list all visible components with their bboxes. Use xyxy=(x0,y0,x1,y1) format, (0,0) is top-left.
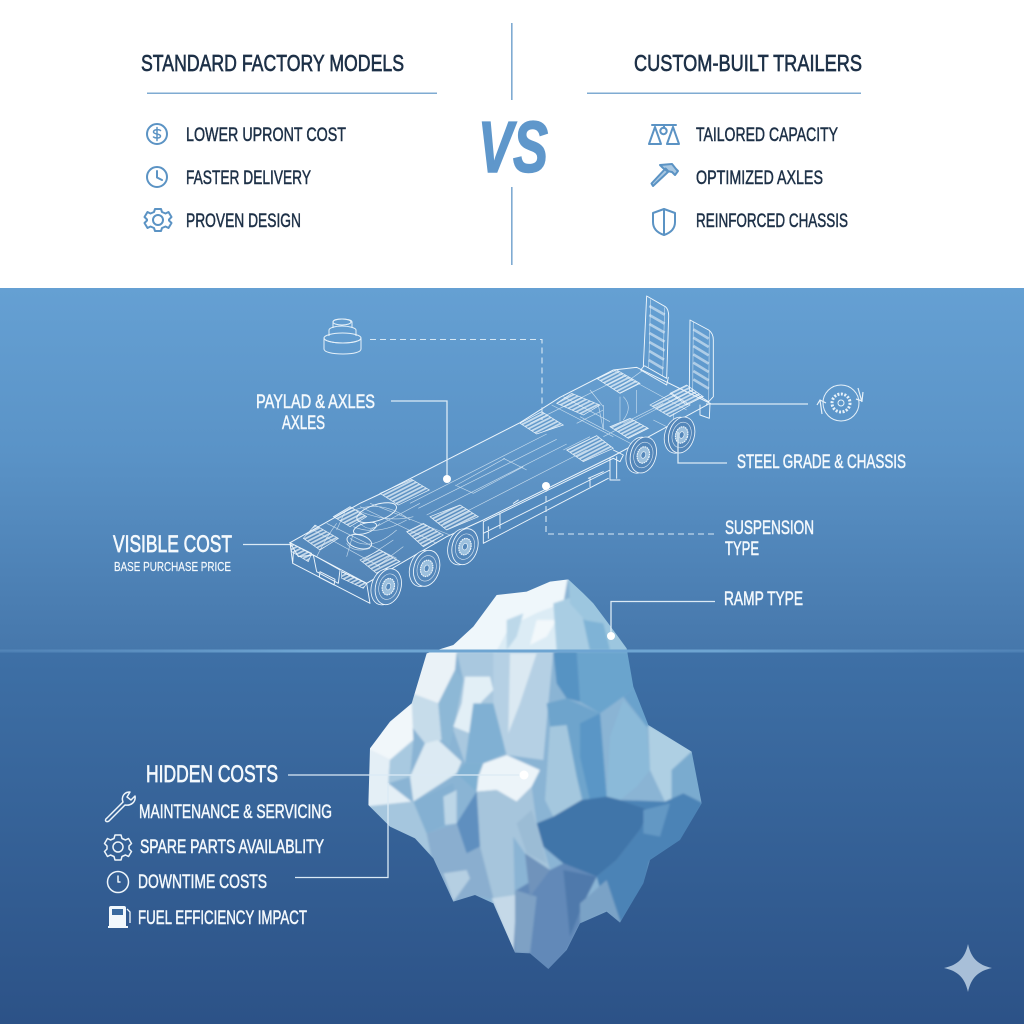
callout: visible cost xyxy=(113,531,290,574)
below-water background xyxy=(0,651,1024,1024)
label: visible cost: VISIBLE COST xyxy=(113,531,232,558)
connector: downtime costs xyxy=(295,783,388,878)
icon: clock xyxy=(108,872,128,892)
label: base purchase price: BASE PURCHASE PRICE xyxy=(114,559,231,574)
ramp: right xyxy=(689,320,713,402)
item: fuel efficiency impact: FUEL EFFICIENCY IMPACT xyxy=(138,908,307,929)
icon: wrench xyxy=(106,792,135,822)
icon: gear xyxy=(144,209,172,231)
icon: hammer xyxy=(652,164,678,186)
label: payload and axles: PAYLAD & AXLES xyxy=(256,392,375,413)
dashed connector: cylinders xyxy=(370,340,542,420)
heading: standard factory models: STANDARD FACTORY MODELS xyxy=(141,50,404,76)
item: spare parts availability: SPARE PARTS AVAILABLITY xyxy=(140,837,324,858)
trailer blueprint xyxy=(290,296,713,608)
callout: wheel and rotation xyxy=(706,385,863,421)
above-water background xyxy=(0,288,1024,651)
item: reinforced chassis: REINFORCED CHASSIS xyxy=(696,210,848,232)
item: lower upfront cost: LOWER UPRONT COST xyxy=(186,124,346,146)
callout: suspension type xyxy=(542,482,814,560)
vs label: VS xyxy=(478,108,548,188)
item: optimized axles: OPTIMIZED AXLES xyxy=(696,167,823,189)
item: proven design: PROVEN DESIGN xyxy=(186,210,301,232)
icon: wheel with arrows xyxy=(817,385,863,421)
hatched panels xyxy=(290,370,703,588)
icon: sparkle xyxy=(944,944,992,992)
white comparison background xyxy=(0,0,1024,288)
wheels xyxy=(367,414,699,608)
label: axles second line: AXLES xyxy=(282,413,325,434)
deck xyxy=(290,367,710,603)
heading: custom-built trailers: CUSTOM-BUILT TRAILERS xyxy=(634,50,862,76)
panel: hidden costs xyxy=(104,761,528,929)
panel: standard factory models xyxy=(141,50,437,232)
connector: hidden costs xyxy=(288,774,524,776)
ramp: left xyxy=(641,296,669,385)
heading underline xyxy=(147,92,437,94)
icon: dollar xyxy=(147,124,167,144)
icon: scales xyxy=(649,125,679,144)
waterline xyxy=(0,650,1024,652)
panel: custom-built trailers xyxy=(587,50,862,235)
label: suspension: SUSPENSION xyxy=(725,518,814,539)
label: steel grade and chassis: STEEL GRADE & CHASSIS xyxy=(737,452,906,473)
callout: steel grade and chassis xyxy=(678,432,906,473)
iceberg xyxy=(368,580,702,969)
item: faster delivery: FASTER DELIVERY xyxy=(186,167,311,189)
item: tailored capacity: TAILORED CAPACITY xyxy=(696,124,838,146)
icon: fuel pump xyxy=(108,906,130,928)
item: downtime costs: DOWNTIME COSTS xyxy=(138,872,267,893)
callout: payload and axles xyxy=(256,392,451,483)
item: maintenance and servicing: MAINTENANCE & SERVICING xyxy=(139,802,332,823)
heading underline xyxy=(587,92,861,94)
callout: ramp type xyxy=(607,589,803,640)
label: type: TYPE xyxy=(725,539,759,560)
icon: clock xyxy=(147,167,167,187)
label: ramp type: RAMP TYPE xyxy=(724,589,803,610)
icon: shield xyxy=(653,209,675,235)
heading: hidden costs: HIDDEN COSTS xyxy=(146,761,278,788)
icon: stacked cylinders xyxy=(324,319,361,354)
icon: gear xyxy=(104,835,132,860)
